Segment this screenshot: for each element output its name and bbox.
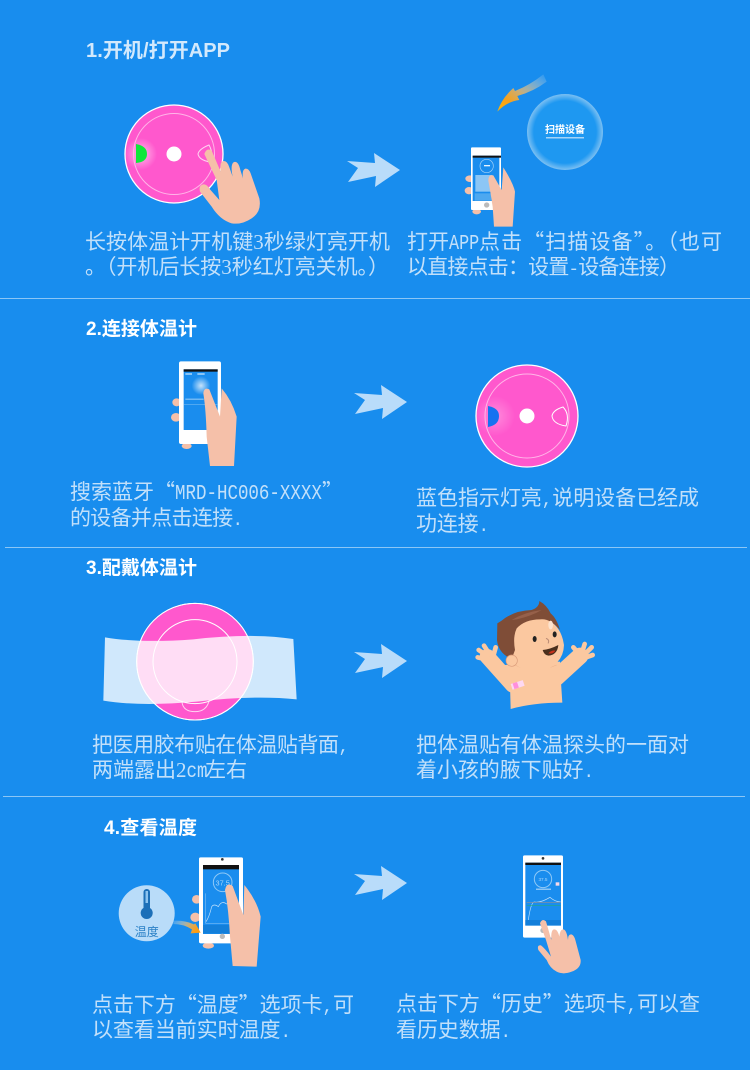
text: tap temperature tab	[92, 989, 354, 1044]
text: long press instructions: 长按体温计开机键3秒绿灯亮开机	[85, 226, 390, 256]
arrow: step 1	[347, 153, 400, 187]
text: attach to underarm	[416, 729, 689, 784]
icon: temperature tab badge	[119, 885, 175, 941]
heading: step 2: 2.连接体温计	[86, 318, 197, 340]
text: search bluetooth: 的设备并点击连接.	[70, 502, 243, 532]
text: tap temperature tab: 点击下方“温度”选项卡,可	[92, 989, 354, 1019]
panel: step 2 connect thermometer	[70, 318, 699, 538]
arrow: orange curved arrow	[497, 74, 547, 112]
arrow: step 2	[354, 385, 407, 419]
text: blue light meaning	[416, 482, 699, 538]
icon: phone showing history with tapping hand: 37.5	[538, 877, 548, 882]
heading: step 3: 3.配戴体温计	[86, 557, 197, 579]
text: open app instructions: 打开	[407, 226, 449, 256]
icon: phone held in hand	[465, 147, 515, 227]
text: open app instructions: APP	[449, 231, 479, 256]
text: long press instructions	[85, 226, 390, 281]
heading: step 4: 4.查看温度	[104, 816, 197, 839]
text: apply tape: 两端露出2	[92, 754, 186, 784]
text: apply tape: 左右	[205, 754, 247, 784]
text: attach to underarm: 着小孩的腋下贴好.	[416, 754, 594, 784]
text: tap temperature tab: 以查看当前实时温度.	[92, 1014, 291, 1044]
text: tap history tab: 点击下方“历史”选项卡,可以查	[396, 988, 700, 1018]
heading: step 1: 1.开机/打开APP	[86, 39, 230, 62]
text: open app instructions: 以直接点击：设置-设备连接）	[407, 251, 680, 281]
text: tap history tab	[396, 988, 700, 1044]
arrow: step 3	[354, 644, 407, 678]
icon: temperature tab badge: 温度	[135, 924, 159, 939]
icon: phone showing temperature in hand: 37.5	[216, 878, 230, 887]
icon: phone searching bluetooth in hand	[171, 361, 237, 466]
panel: step 1 power on and open app	[85, 39, 722, 281]
text: long press instructions: 。（开机后长按3秒红灯亮关机。）	[85, 251, 389, 281]
icon: thermometer patch with green light	[125, 105, 223, 203]
text: tap history tab: 看历史数据.	[396, 1014, 511, 1044]
icon: scan device button: 扫描设备	[545, 123, 585, 136]
icon: phone showing temperature in hand	[190, 857, 261, 967]
text: search bluetooth: ”	[322, 476, 343, 506]
text: apply tape: cm	[186, 760, 207, 784]
text: blue light meaning: 功连接.	[416, 508, 489, 538]
text: apply tape	[92, 729, 349, 784]
icon: thermometer patch with blue light	[475, 365, 578, 467]
arrow: orange pointer to tab	[173, 921, 201, 933]
icon: hand pressing button	[200, 150, 260, 224]
panel: step 3 wear thermometer	[86, 557, 689, 784]
text: open app instructions	[407, 226, 722, 281]
arrow: step 4	[354, 866, 407, 900]
text: search bluetooth: 搜索蓝牙“	[70, 476, 175, 506]
text: search bluetooth: MRD-HC006-XXXX	[175, 482, 322, 506]
icon: baby with patch under arm	[478, 601, 593, 709]
text: open app instructions: 点击“扫描设备”。（也可	[479, 226, 722, 256]
text: apply tape: 把医用胶布贴在体温贴背面,	[92, 729, 349, 759]
icon: phone showing history with tapping hand	[523, 855, 581, 973]
icon: scan device button	[527, 94, 603, 170]
panel: step 4 view temperature	[92, 816, 700, 1044]
text: attach to underarm: 把体温贴有体温探头的一面对	[416, 729, 689, 759]
icon: patch with medical tape	[103, 603, 297, 720]
text: search bluetooth	[70, 476, 343, 532]
text: blue light meaning: 蓝色指示灯亮,说明设备已经成	[416, 482, 699, 512]
